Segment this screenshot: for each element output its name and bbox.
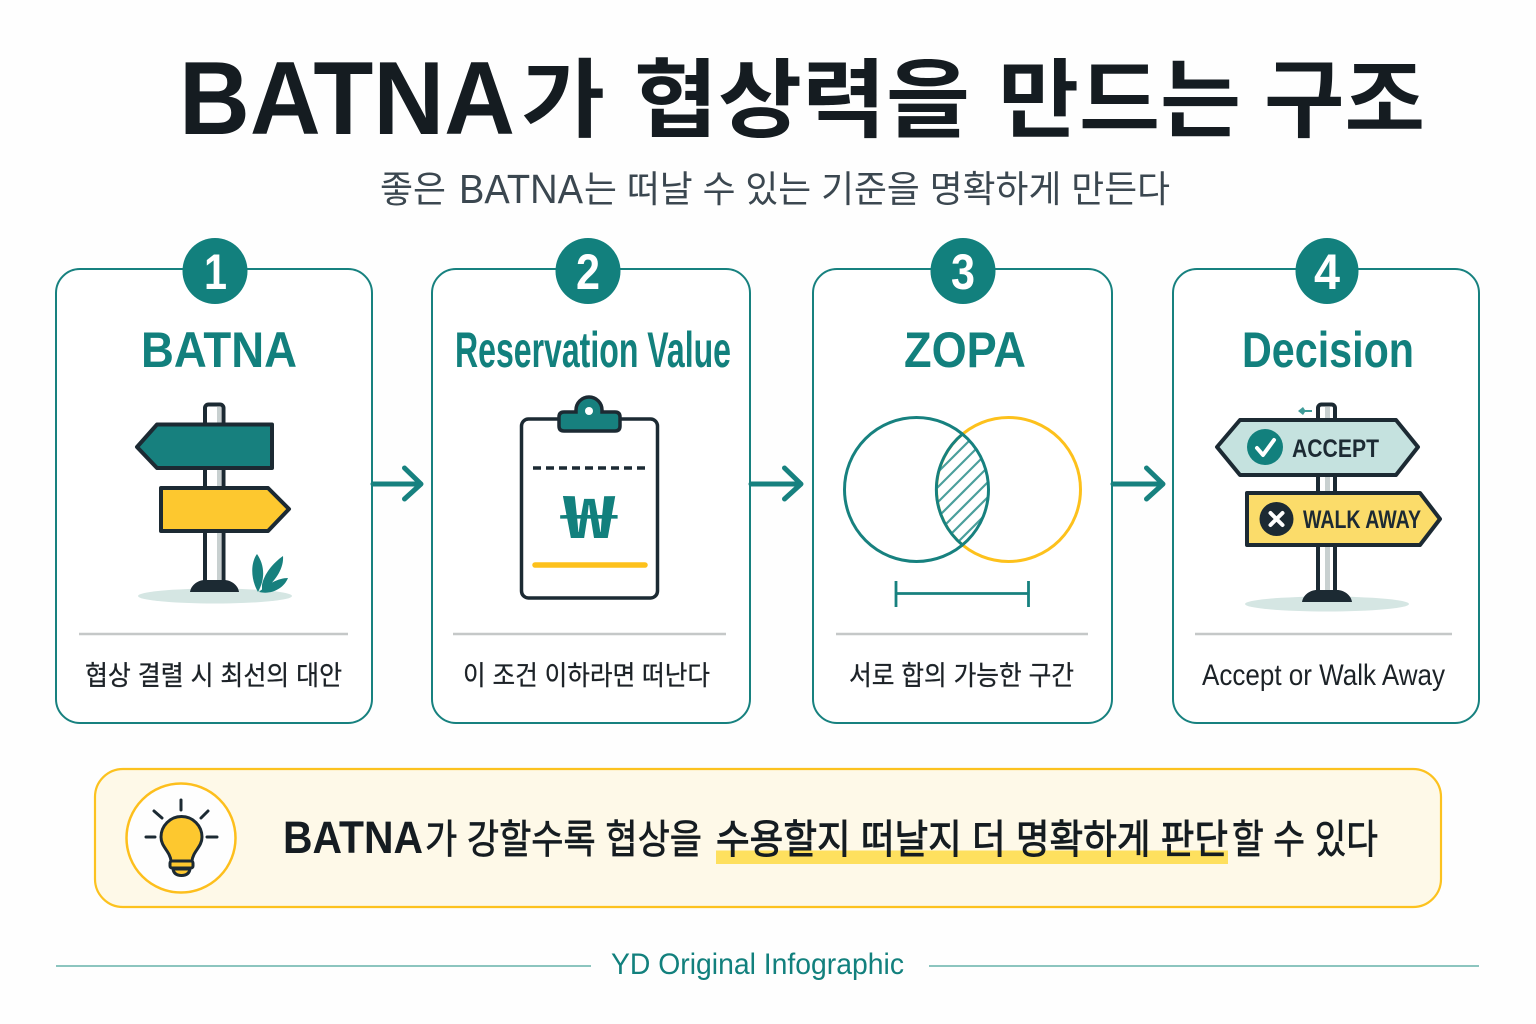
title: 가 (521, 53, 605, 149)
heading: BATNA: BATNA (141, 322, 297, 378)
caption: 협상 결렬 시 최선의 대안 (85, 661, 342, 691)
callout text (283, 812, 1378, 863)
subtitle: 좋은 (380, 169, 446, 210)
panel: Decision (1173, 238, 1479, 723)
title: BATNA (179, 41, 515, 157)
title (179, 41, 1425, 157)
icon: venn diagram (844, 405, 1080, 607)
highlight (716, 850, 1228, 864)
arrow 3 to 4 (1113, 468, 1163, 499)
footer: YD Original Infographic (611, 948, 904, 981)
arrow 2 to 3 (751, 468, 801, 499)
icon: clipboard: ₩ (559, 471, 619, 555)
panel: Reservation Value (432, 238, 750, 723)
icon: signpost (137, 404, 292, 604)
heading: ZOPA: ZOPA (904, 322, 1026, 378)
caption: Accept or Walk Away (1202, 659, 1445, 692)
icon: clipboard (522, 397, 658, 598)
badge 2 (556, 238, 620, 304)
icon: light bulb (126, 784, 236, 892)
icon: accept or walk away signpost: WALK AWAY (1303, 506, 1421, 534)
badge 2: 2 (576, 244, 600, 300)
subtitle: BATNA (459, 166, 584, 212)
title: 구조 (1264, 53, 1425, 149)
title: 협상력을 (634, 53, 970, 149)
caption: 이 조건 이하라면 떠난다 (463, 661, 710, 691)
panel: ZOPA (813, 238, 1112, 723)
callout text: 할 수 있다 (1232, 818, 1378, 862)
callout text: BATNA (283, 812, 423, 863)
badge 1 (182, 238, 248, 304)
arrow 1 to 2 (373, 468, 421, 499)
badge 3 (930, 238, 996, 304)
caption: 서로 합의 가능한 구간 (849, 661, 1074, 691)
icon: accept or walk away signpost: ACCEPT (1292, 435, 1379, 463)
title: 만드는 (998, 53, 1241, 149)
icon: accept or walk away signpost (1217, 404, 1440, 612)
callout text: 수용할지 떠날지 더 명확하게 판단 (716, 818, 1228, 862)
panel: BATNA (56, 238, 372, 723)
subtitle (380, 166, 1170, 212)
heading: Decision: Decision (1242, 322, 1414, 378)
badge 3: 3 (951, 244, 975, 300)
callout (95, 769, 1441, 907)
callout text: 가 강할수록 협상을 (425, 818, 702, 862)
badge 1: 1 (204, 244, 227, 300)
badge 4 (1296, 238, 1358, 304)
heading: Reservation Value: Reservation Value (455, 322, 731, 378)
badge 4: 4 (1314, 244, 1340, 300)
subtitle: 는 떠날 수 있는 기준을 명확하게 만든다 (584, 169, 1170, 210)
